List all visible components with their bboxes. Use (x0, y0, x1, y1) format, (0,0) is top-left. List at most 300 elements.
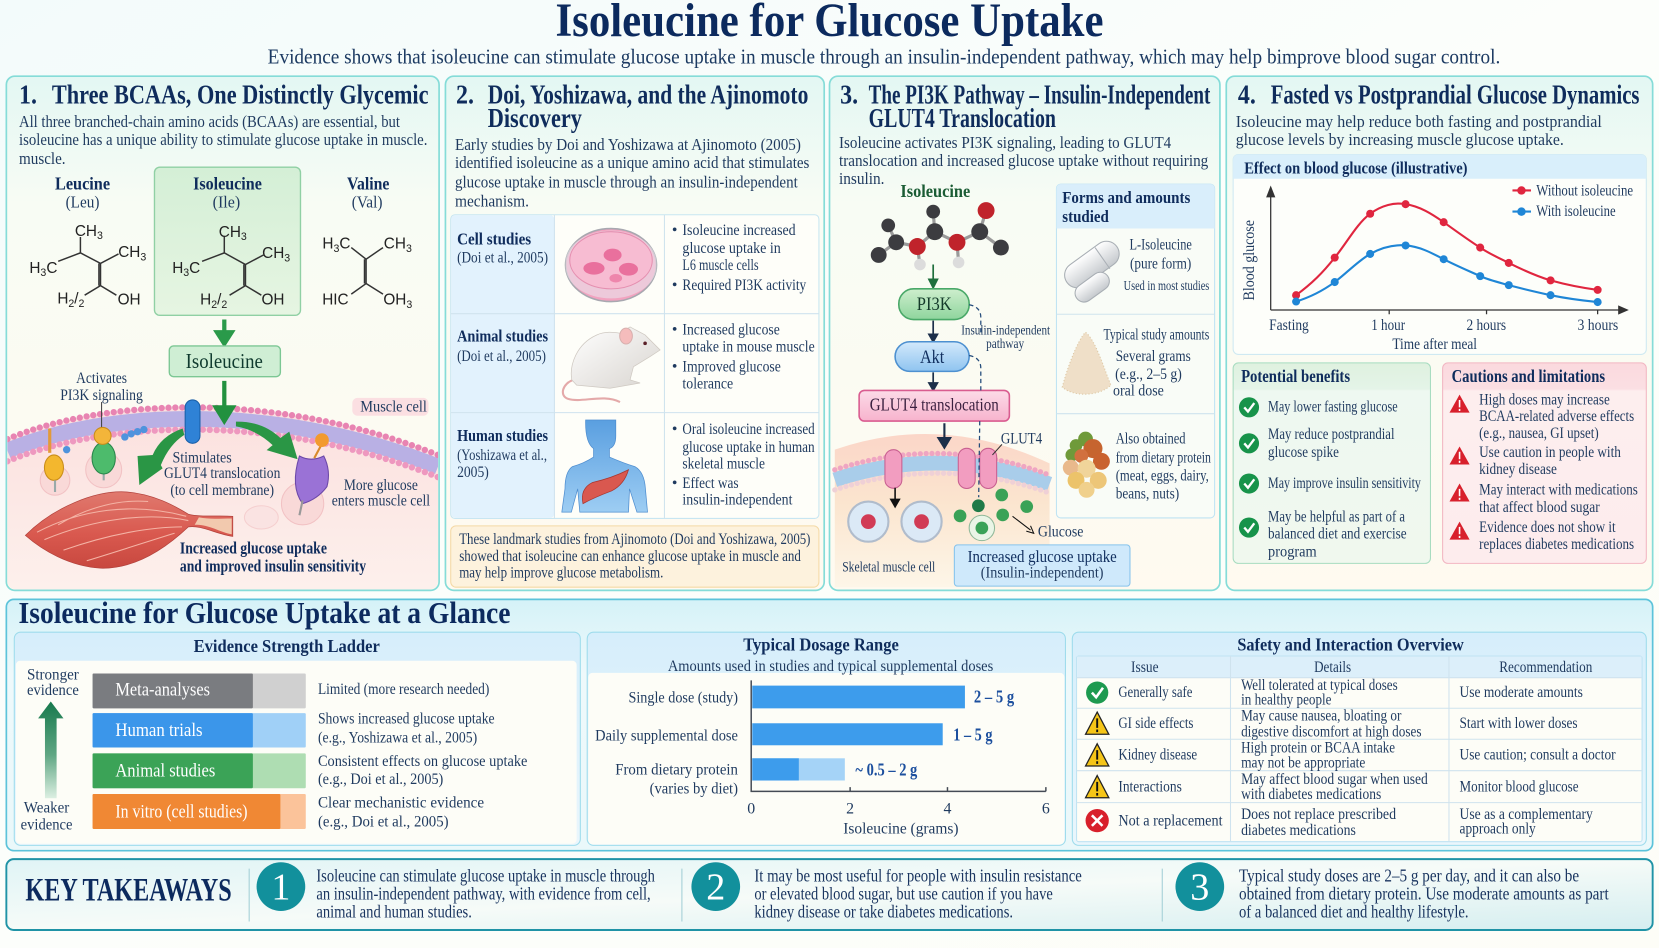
row: cell studies: Required PI3K activity (682, 277, 806, 294)
cautions list: Use caution in people with (1479, 444, 1621, 461)
cautions list: Evidence does not show it (1479, 519, 1616, 536)
form: L-isoleucine: Used in most studies (1124, 278, 1209, 293)
safety details: High protein or BCAA intake (1241, 739, 1395, 756)
safety details: in healthy people (1241, 692, 1332, 709)
safety recommendations: Use as a complementary (1460, 806, 1593, 823)
series: with isoleucine (1292, 241, 1602, 306)
takeaway 3: of a balanced diet and healthy lifestyle. (1239, 901, 1469, 921)
form: typical amounts: Typical study amounts (1104, 327, 1209, 344)
line chart (1233, 154, 1646, 354)
chart axes (1267, 187, 1627, 314)
safety recommendations (1460, 684, 1616, 838)
evidence ladder (14, 632, 580, 845)
ladder descriptions: Clear mechanistic evidence (318, 794, 484, 811)
icon: protein foods (1063, 432, 1110, 498)
at a glance heading: Isoleucine for Glucose Uptake at a Glance (19, 596, 511, 630)
panel 2 heading (456, 79, 808, 133)
panel 2 intro (455, 135, 809, 210)
GLUT4 label: (to cell membrane) (170, 482, 274, 499)
dosage axis labels: 4 (944, 801, 952, 818)
ladder descriptions: (e.g., Yoshizawa et al., 2005) (318, 730, 477, 747)
arrow: to membrane (216, 381, 233, 421)
PI3K label: Activates (76, 370, 127, 387)
GLUT4 translocation pill: GLUT4 translocation (870, 395, 999, 415)
cautions panel: Cautions and limitations (1452, 366, 1605, 386)
panel: three BCAAs (6, 76, 439, 590)
PI3K label: PI3K signaling (60, 387, 143, 404)
study table (451, 215, 819, 518)
arrow: evidence direction (38, 701, 63, 798)
glucose label (1013, 516, 1083, 540)
isoleucine highlighted structure: 3 (183, 267, 189, 279)
isoleucine highlighted structure: H (200, 292, 211, 309)
isoleucine highlighted structure: / (217, 292, 222, 309)
potential benefits panel: Potential benefits (1241, 366, 1350, 386)
more glucose label (332, 477, 431, 510)
row: animal studies: Increased glucose (682, 321, 780, 338)
leucine structure: (Leu) (66, 192, 99, 211)
isoleucine highlighted structure (154, 167, 300, 315)
safety heading: Safety and Interaction Overview (1237, 635, 1464, 655)
ladder descriptions: Limited (more research needed) (318, 681, 489, 698)
ladder descriptions: Shows increased glucose uptake (318, 711, 495, 728)
dosage heading (668, 635, 993, 675)
dosage values: 2 – 5 g (974, 687, 1014, 707)
PI3K pill: PI3K (917, 294, 952, 315)
row: human studies (457, 421, 815, 509)
more glucose label: More glucose (344, 477, 418, 494)
benefits list: May reduce postprandial (1268, 426, 1395, 443)
valine structure: (Val) (352, 192, 382, 211)
bar: human trials: Human trials (115, 720, 203, 741)
isoleucine highlighted structure: H (172, 260, 183, 277)
icon: muscle (25, 492, 233, 568)
GLUT4 label: GLUT4 translocation (164, 465, 280, 482)
panel 1 heading: 1. (19, 79, 37, 110)
dosage heading: Amounts used in studies and typical supplemental doses (668, 658, 993, 675)
chart legend (1512, 183, 1633, 220)
valine structure: Valine (347, 173, 389, 193)
form: typical amounts: Several grams (1116, 348, 1191, 365)
panel 2 heading: 2. (456, 79, 474, 110)
chart legend: Without isoleucine (1536, 183, 1633, 200)
chart axis labels: Time after meal (1392, 336, 1478, 353)
row: cell studies: glucose uptake in (682, 240, 781, 257)
form: typical amounts: oral dose (1113, 383, 1164, 400)
dosage values (855, 687, 1014, 780)
dosage bars (752, 686, 965, 781)
row: human studies: • (672, 421, 677, 438)
takeaway 1: Isoleucine can stimulate glucose uptake in muscle through (316, 865, 655, 885)
chart axis labels: Blood glucose (1241, 220, 1258, 300)
row: animal studies: • (672, 358, 677, 375)
panel 3 intro: insulin. (839, 169, 885, 188)
safety issues: Generally safe (1118, 684, 1192, 701)
leucine structure: 2 (68, 298, 74, 310)
safety details: Does not replace prescribed (1241, 806, 1396, 823)
row: cell studies (457, 222, 806, 294)
Akt pill: Akt (920, 347, 945, 368)
leucine structure: 3 (140, 251, 146, 263)
row: human studies: skeletal muscle (682, 456, 765, 473)
dosage values: 1 – 5 g (953, 725, 993, 745)
row: human studies: 2005) (457, 464, 489, 481)
safety table header (1131, 659, 1592, 676)
dosage axis labels: 2 (846, 801, 854, 818)
takeaway 1: 1 (271, 866, 290, 908)
row: human studies: insulin-independent (682, 492, 793, 509)
takeaway 1: an insulin-independent pathway, with evidence from cell, (316, 883, 651, 903)
panel 4 intro (1236, 112, 1602, 149)
form: typical amounts (1104, 327, 1209, 400)
ladder axis labels: evidence (21, 816, 72, 833)
GLUT4 label: Stimulates (172, 449, 232, 466)
icon: safety status (1086, 681, 1109, 832)
panel 3 intro: Isoleucine activates PI3K signaling, leading to GLUT4 (839, 133, 1172, 152)
valine structure: OH (383, 292, 406, 309)
form: dietary sources: (meat, eggs, dairy, (1116, 467, 1209, 484)
safety recommendations: Use moderate amounts (1460, 684, 1583, 701)
callout: landmark studies: showed that isoleucine can enhance glucose uptake in muscle and (459, 548, 801, 565)
safety issues: Not a replacement (1118, 812, 1223, 829)
isoleucine highlighted structure: CH (219, 224, 241, 241)
Akt pill (895, 342, 969, 371)
series: without isoleucine (1292, 200, 1602, 299)
icon: membrane proteins (44, 400, 329, 515)
subtitle: Evidence shows that isoleucine can stimulate glucose uptake in muscle through an insulin-independent pathway, which may help bimprove blood sugar control. (268, 46, 1500, 68)
insulin-independent label (961, 322, 1050, 351)
panel 3 intro: translocation and increased glucose uptake without requiring (839, 151, 1209, 170)
arrow: to membrane (938, 423, 950, 448)
GLUT4 label (992, 430, 1042, 455)
dosage axis labels: 0 (747, 801, 755, 818)
ladder axis labels: Weaker (24, 800, 70, 817)
ladder axis labels (21, 666, 79, 834)
muscle cell illustration (7, 407, 438, 589)
panel: PI3K pathway (830, 76, 1220, 590)
cautions list: (e.g., nausea, GI upset) (1479, 425, 1599, 442)
chart axis labels (1241, 220, 1618, 353)
row: animal studies: uptake in mouse muscle (682, 338, 815, 355)
cautions panel (1443, 363, 1646, 563)
panel: forms and amounts (1056, 184, 1215, 518)
takeaway 3 (1175, 862, 1609, 921)
row: animal studies: (Doi et al., 2005) (457, 348, 546, 365)
PI3K label (60, 370, 143, 404)
safety details: diabetes medications (1241, 822, 1356, 839)
safety table header: Recommendation (1499, 659, 1592, 676)
ladder descriptions: Consistent effects on glucose uptake (318, 753, 527, 770)
takeaway 3: 3 (1190, 866, 1209, 908)
cautions list: that affect blood sugar (1479, 499, 1600, 516)
ladder axis labels: evidence (27, 682, 79, 699)
takeaway 3: obtained from dietary protein. Use moderate amounts as part (1239, 883, 1609, 903)
dosage category labels: Single dose (study) (628, 690, 738, 707)
leucine structure: H (57, 291, 68, 308)
isoleucine highlighted structure: OH (261, 292, 284, 309)
isoleucine molecule label: Isoleucine (900, 181, 970, 201)
skeletal muscle label: Skeletal muscle cell (842, 559, 935, 575)
increased uptake box (954, 545, 1130, 586)
key takeaways heading: KEY TAKEAWAYS (25, 872, 232, 908)
isoleucine highlighted structure: 3 (284, 252, 290, 264)
panel 3 heading (840, 79, 1211, 133)
arrow: PI3K to Akt (929, 321, 937, 342)
safety details: digestive discomfort at high doses (1241, 723, 1421, 740)
valine structure: 3 (406, 299, 412, 311)
panel 1 intro (19, 112, 427, 168)
benefits list: balanced diet and exercise (1268, 526, 1407, 543)
safety issues: GI side effects (1118, 715, 1193, 732)
icon: petri dish (566, 229, 657, 302)
leucine structure: 3 (40, 267, 46, 279)
cautions list: High doses may increase (1479, 392, 1610, 409)
panel 1 heading: Three BCAAs, One Distinctly Glycemic (52, 79, 429, 110)
panel: fasted vs postprandial (1226, 76, 1653, 590)
valine structure (322, 173, 412, 311)
safety recommendations: Start with lower doses (1460, 715, 1578, 732)
benefits list: May lower fasting glucose (1268, 399, 1398, 416)
chart legend: With isoleucine (1536, 203, 1616, 220)
takeaway 2: kidney disease or take diabetes medications. (754, 901, 1013, 921)
safety table header: Details (1314, 659, 1351, 676)
forms heading: studied (1062, 207, 1109, 226)
isoleucine pill: Isoleucine (186, 349, 263, 373)
row: animal studies: Improved glucose (682, 358, 781, 375)
bar: animal studies: Animal studies (115, 761, 215, 782)
dosage axes (751, 680, 1046, 791)
dosage values: ~ 0.5 – 2 g (855, 760, 918, 780)
safety details: Well tolerated at typical doses (1241, 677, 1398, 694)
benefits list: glucose spike (1268, 444, 1339, 461)
form: dietary sources (1116, 430, 1211, 502)
chart axis labels: 3 hours (1578, 317, 1618, 334)
arrow: vesicle (891, 488, 899, 507)
valine structure: 3 (334, 243, 340, 255)
row: cell studies: • (672, 277, 677, 294)
panel 2 intro: identified isoleucine as a unique amino acid that stimulates (455, 153, 809, 172)
takeaway 2: 2 (706, 866, 725, 908)
isoleucine highlighted structure: 3 (241, 231, 247, 243)
safety details: may not be appropriate (1241, 755, 1365, 772)
panel: at a glance (6, 596, 1653, 851)
panel 3 heading: 3. (840, 79, 858, 110)
outcome label (180, 538, 367, 575)
dosage axis labels: 6 (1042, 801, 1050, 818)
isoleucine highlighted structure: 2 (211, 299, 217, 311)
form: dietary sources: beans, nuts) (1116, 485, 1179, 502)
isoleucine highlighted structure: Isoleucine (193, 173, 262, 193)
icon: warning triangles (1450, 395, 1470, 540)
safety details: May cause nausea, bloating or (1241, 708, 1402, 725)
panel 3 heading: The PI3K Pathway – Insulin-Independent (869, 79, 1211, 110)
valine structure: C (339, 236, 350, 253)
muscle cell label: Muscle cell (360, 399, 427, 416)
leucine structure: CH (118, 244, 140, 261)
icon: check marks (1239, 397, 1259, 538)
insulin-independent label: pathway (986, 336, 1024, 351)
leucine structure: / (74, 291, 79, 308)
line chart: Effect on blood glucose (illustrative) (1244, 159, 1467, 178)
panel 2 heading: Doi, Yoshizawa, and the Ajinomoto (488, 79, 808, 110)
chart axis labels: 2 hours (1466, 317, 1506, 334)
skeletal muscle cell illustration (835, 434, 1050, 587)
bar: human trials (93, 713, 306, 748)
panel 2 intro: Early studies by Doi and Yoshizawa at Ajinomoto (2005) (455, 135, 801, 154)
dosage axis labels: Isoleucine (grams) (843, 821, 959, 838)
row: animal studies: Animal studies (457, 327, 548, 346)
dosage category labels: Daily supplemental dose (595, 728, 738, 745)
takeaway 1: animal and human studies. (316, 901, 472, 921)
panel 1 intro: All three branched-chain amino acids (BCAAs) are essential, but (19, 112, 400, 131)
panel 3 heading: GLUT4 Translocation (869, 102, 1056, 133)
potential benefits panel (1233, 363, 1430, 563)
safety details: May affect blood sugar when used (1241, 771, 1428, 788)
icon: capsules (1060, 236, 1124, 306)
callout: landmark studies: These landmark studies from Ajinomoto (Doi and Yoshizawa, 2005) (459, 531, 810, 548)
safety table (1072, 632, 1646, 845)
bar: animal studies (93, 753, 306, 788)
row: cell studies: Cell studies (457, 229, 531, 248)
form: L-isoleucine (1124, 237, 1209, 293)
isoleucine highlighted structure: (Ile) (213, 192, 240, 211)
isoleucine pill (169, 346, 280, 377)
safety details: with diabetes medications (1241, 786, 1381, 803)
row: human studies: Oral isoleucine increased (682, 421, 815, 438)
row: animal studies: • (672, 321, 677, 338)
form: L-isoleucine: L-Isoleucine (1129, 237, 1192, 254)
row: human studies: Effect was (682, 475, 739, 492)
forms heading (1062, 188, 1191, 226)
arrow: curved right (236, 422, 298, 459)
cautions list (1479, 392, 1638, 553)
panel: key takeaways (6, 859, 1653, 930)
row: human studies: • (672, 475, 677, 492)
GLUT4 label: GLUT4 (1001, 430, 1042, 447)
panel 4 heading: 4. (1238, 79, 1256, 110)
panel 2 intro: glucose uptake in muscle through an insulin-independent (455, 172, 798, 191)
panel 1 intro: muscle. (19, 149, 66, 168)
safety recommendations: approach only (1460, 821, 1536, 838)
row: cell studies: (Doi et al., 2005) (457, 249, 548, 266)
valine structure: HIC (322, 292, 349, 309)
row: animal studies: tolerance (682, 375, 733, 392)
form: dietary sources: Also obtained (1116, 430, 1186, 447)
row: animal studies (457, 321, 815, 392)
ladder axis labels: Stronger (27, 666, 79, 683)
benefits list (1268, 399, 1421, 561)
row: human studies: Human studies (457, 426, 548, 445)
safety issues: Kidney disease (1118, 747, 1197, 764)
insulin-independent label: Insulin-independent (961, 322, 1050, 337)
safety recommendations: Monitor blood glucose (1460, 778, 1579, 795)
dosage heading: Typical Dosage Range (743, 635, 899, 655)
dashed insulin-independent path (969, 305, 981, 497)
valine structure: CH (384, 236, 406, 253)
glucose label: Glucose (1038, 523, 1083, 540)
panel 3 intro (839, 133, 1209, 188)
bar: in vitro: In vitro (cell studies) (115, 801, 248, 822)
panel 2 intro: mechanism. (455, 191, 529, 210)
panel 4 intro: Isoleucine may help reduce both fasting and postprandial (1236, 112, 1602, 131)
leucine structure: CH (75, 223, 97, 240)
icon: ball and stick molecule (871, 202, 1009, 270)
icon: human torso with muscle (562, 420, 648, 512)
safety details (1241, 677, 1428, 839)
valine structure: 3 (406, 243, 412, 255)
cautions list: kidney disease (1479, 461, 1557, 478)
bar: in vitro (93, 794, 306, 829)
isoleucine highlighted structure: 2 (221, 299, 227, 311)
leucine structure: C (46, 260, 57, 277)
takeaway 2: It may be most useful for people with insulin resistance (754, 865, 1082, 885)
dosage axis labels (747, 801, 1050, 838)
form: typical amounts: (e.g., 2–5 g) (1115, 366, 1182, 383)
benefits list: May improve insulin sensitivity (1268, 475, 1421, 492)
takeaway 3: Typical study doses are 2–5 g per day, and it can also be (1239, 865, 1579, 885)
takeaway 2 (691, 862, 1082, 921)
row: cell studies: Isoleucine increased (682, 222, 796, 239)
bar: meta-analyses: Meta-analyses (115, 680, 210, 701)
leucine structure: 3 (97, 230, 103, 242)
panel: Doi and Yoshizawa (445, 76, 824, 590)
valine structure: H (322, 236, 334, 253)
GLUT4 translocation pill (859, 390, 1009, 421)
panel 1 intro: isoleucine has a unique ability to stimulate glucose uptake in muscle. (19, 130, 427, 149)
increased uptake box: Increased glucose uptake (968, 547, 1117, 566)
dosage category labels: From dietary protein (615, 761, 738, 778)
takeaway 2: or elevated blood sugar, but use caution if you have (754, 883, 1053, 903)
arrow: curved left (138, 429, 184, 485)
ladder descriptions: (e.g., Doi et al., 2005) (318, 813, 449, 830)
leucine structure: 2 (79, 298, 85, 310)
safety issues: Interactions (1118, 778, 1182, 795)
arrow: molecule to PI3K (929, 265, 937, 288)
form: L-isoleucine: (pure form) (1130, 256, 1191, 273)
outcome label: and improved insulin sensitivity (180, 556, 367, 575)
bar: meta-analyses (93, 673, 306, 708)
chart axis labels: 1 hour (1371, 317, 1406, 334)
GLUT4 label (164, 449, 280, 499)
PI3K pill (899, 289, 969, 320)
isoleucine highlighted structure: CH (262, 245, 284, 262)
row: cell studies: • (672, 222, 677, 239)
icon: mouse (563, 327, 660, 402)
forms heading: Forms and amounts (1062, 188, 1191, 207)
leucine structure: H (29, 260, 40, 277)
dosage category labels: (varies by diet) (650, 781, 738, 798)
leucine structure: Leucine (55, 173, 110, 193)
panel 2 heading: Discovery (488, 102, 582, 133)
callout: landmark studies (451, 526, 819, 587)
row: cell studies: L6 muscle cells (682, 257, 759, 274)
chart axis labels: Fasting (1269, 317, 1309, 334)
benefits list: May be helpful as part of a (1268, 509, 1405, 526)
dosage chart (587, 632, 1065, 845)
arrow: Akt to GLUT4 (929, 372, 937, 390)
more glucose label: enters muscle cell (332, 493, 431, 510)
safety table header: Issue (1131, 659, 1159, 676)
leucine structure (29, 173, 146, 310)
row: human studies: (Yoshizawa et al., (457, 447, 547, 464)
safety recommendations: Use caution; consult a doctor (1460, 747, 1616, 764)
panel 4 intro: glucose levels by increasing muscle glucose uptake. (1236, 130, 1564, 149)
outcome label: Increased glucose uptake (180, 538, 327, 557)
leucine structure: OH (118, 292, 141, 309)
safety issues (1118, 684, 1223, 829)
dosage category labels (595, 690, 738, 798)
form: dietary sources: from dietary protein (1116, 449, 1211, 466)
